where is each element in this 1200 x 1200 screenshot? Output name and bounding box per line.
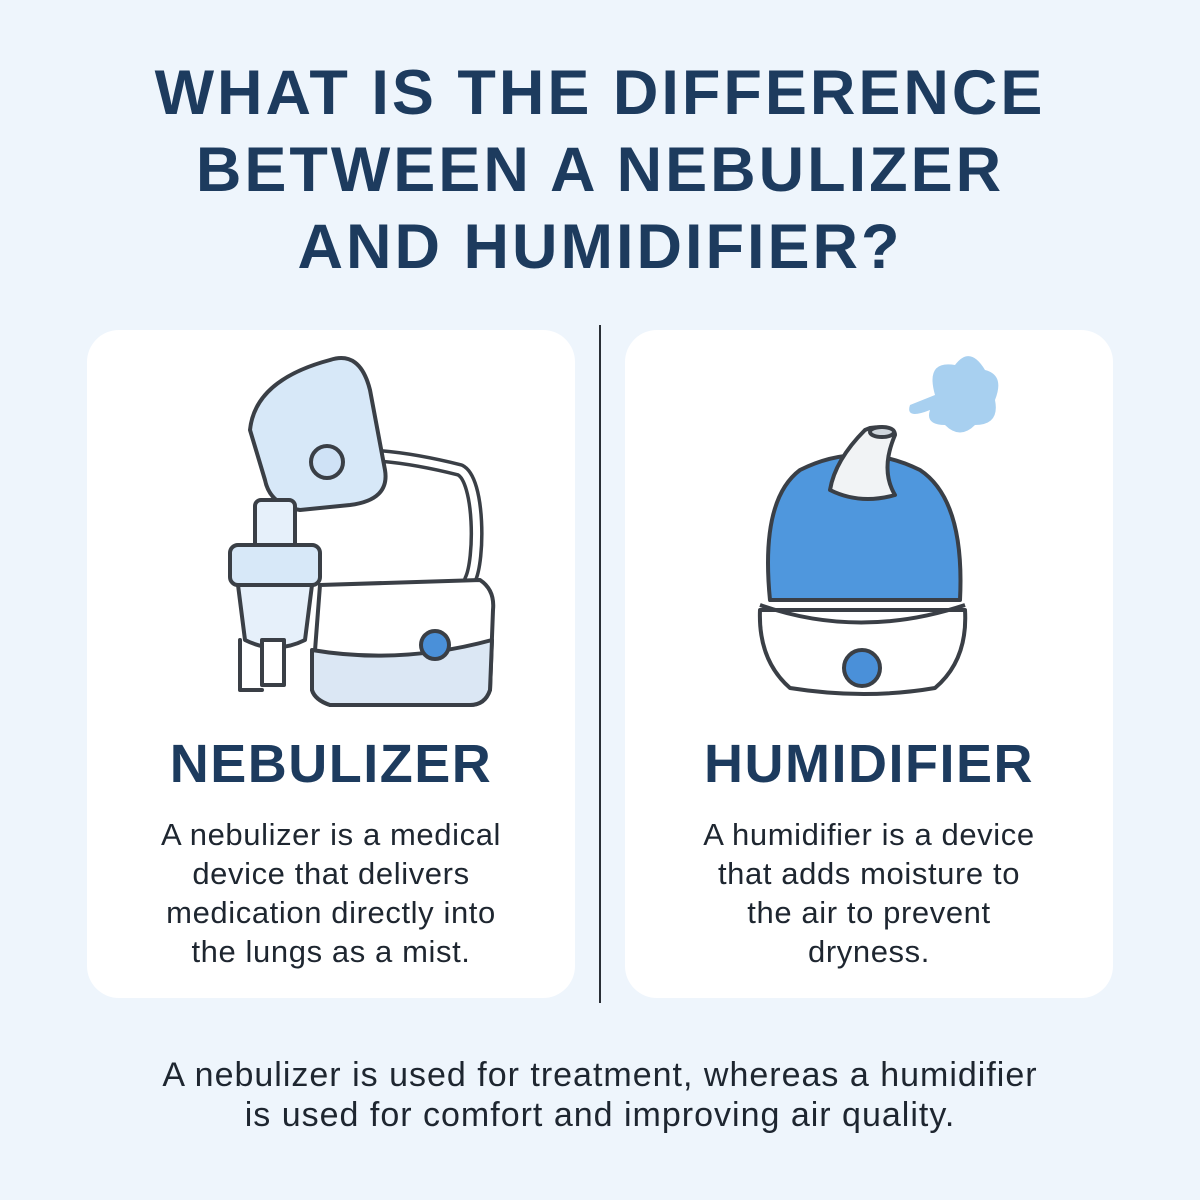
text: humidifier description: A humidifier is a device xyxy=(703,817,1035,852)
footer text: A nebulizer is used for treatment, whereas a humidifier xyxy=(162,1056,1038,1094)
text: nebulizer description: medication directly into xyxy=(166,895,496,930)
divider xyxy=(599,325,601,1003)
text: nebulizer description: A nebulizer is a medical xyxy=(161,817,501,852)
text: nebulizer description: the lungs as a mist. xyxy=(191,934,471,969)
text: humidifier description: dryness. xyxy=(808,934,930,969)
heading: humidifier: HUMIDIFIER xyxy=(704,734,1034,794)
footer text xyxy=(162,1056,1038,1134)
heading: nebulizer: NEBULIZER xyxy=(170,734,492,794)
title: AND HUMIDIFIER? xyxy=(298,212,902,282)
title: WHAT IS THE DIFFERENCE xyxy=(155,58,1045,128)
text: humidifier description: the air to prevent xyxy=(747,895,991,930)
text: nebulizer description: device that delivers xyxy=(192,856,470,891)
title: BETWEEN A NEBULIZER xyxy=(196,135,1004,205)
text: nebulizer description xyxy=(161,817,501,969)
footer text: is used for comfort and improving air quality. xyxy=(245,1096,955,1134)
text: humidifier description: that adds moisture to xyxy=(718,856,1020,891)
title xyxy=(154,58,1045,282)
panel: humidifier xyxy=(625,330,1113,998)
icon: nebulizer xyxy=(228,356,496,707)
panel: nebulizer xyxy=(87,330,575,998)
text: humidifier description xyxy=(703,817,1035,969)
icon: humidifier xyxy=(758,356,998,696)
